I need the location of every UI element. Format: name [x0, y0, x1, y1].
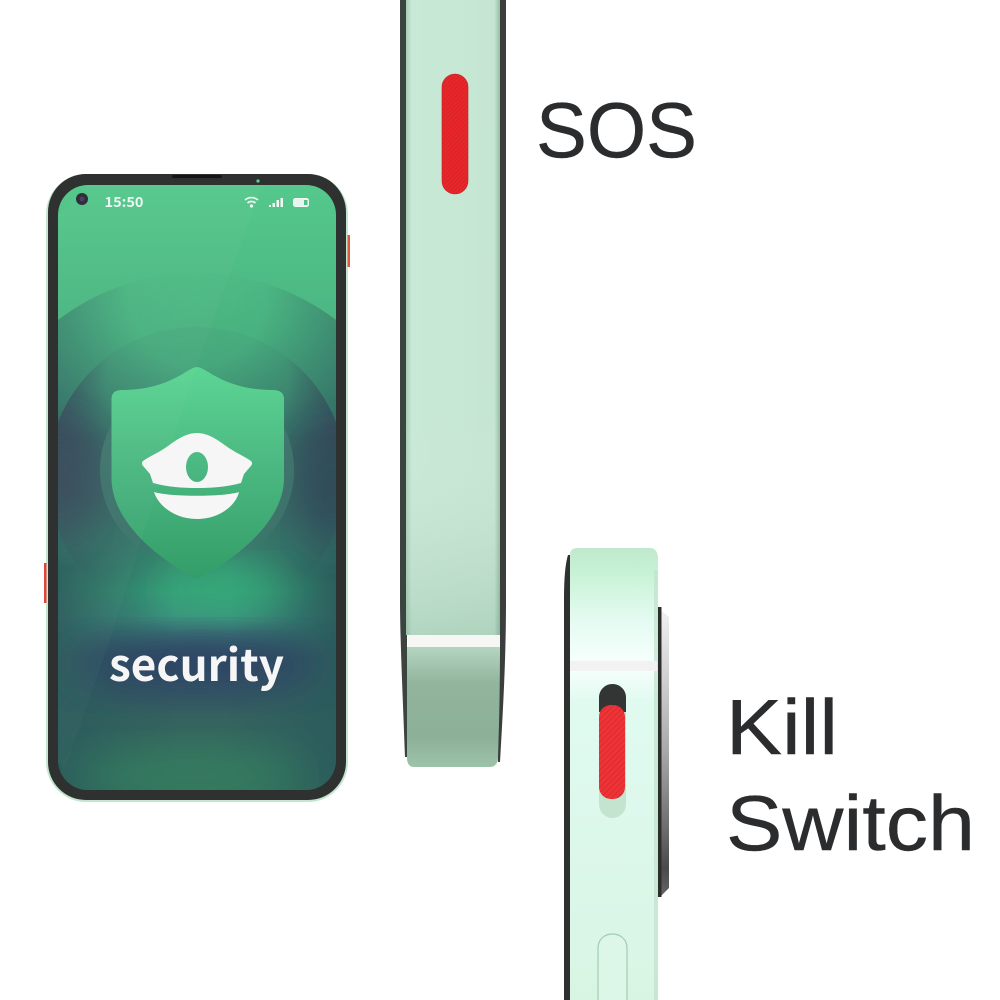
lower side button [598, 934, 627, 1000]
left dark edge [400, 0, 407, 757]
screen light sweep [58, 185, 262, 770]
slot dark top [599, 684, 626, 712]
white band [570, 661, 657, 671]
Kill Switch label: Kill [726, 683, 838, 771]
white band [408, 635, 500, 647]
right red button [348, 235, 350, 267]
icon: battery [294, 198, 308, 206]
earpiece [172, 175, 222, 178]
left red button [44, 563, 46, 603]
side view phone: Kill Switch [564, 548, 669, 1000]
screen label: security [109, 630, 284, 694]
bump dark edge [658, 607, 662, 897]
screen [58, 185, 336, 790]
icon: police cap [142, 433, 252, 519]
camera bump [657, 607, 669, 897]
SOS button [442, 74, 468, 194]
phone frame [46, 174, 348, 802]
right edge highlight [654, 570, 658, 1000]
Kill Switch label [726, 683, 975, 867]
clock: 15:50 [104, 192, 144, 212]
Kill Switch label: Switch [726, 779, 975, 867]
SOS label: SOS [536, 86, 697, 174]
icon: wifi [245, 198, 258, 207]
side body [570, 548, 658, 1000]
front phone [44, 174, 350, 802]
switch red slider [599, 705, 625, 799]
left dark edge [564, 555, 571, 1000]
switch slot [599, 684, 626, 818]
shield [112, 367, 284, 578]
camera [76, 193, 88, 205]
icon: signal [269, 198, 283, 207]
sensor dot [256, 179, 260, 183]
side view phone: SOS [400, 0, 506, 767]
phone bezel [48, 174, 346, 800]
bottom section [407, 647, 500, 767]
right dark edge [498, 0, 506, 762]
side body [406, 0, 500, 635]
